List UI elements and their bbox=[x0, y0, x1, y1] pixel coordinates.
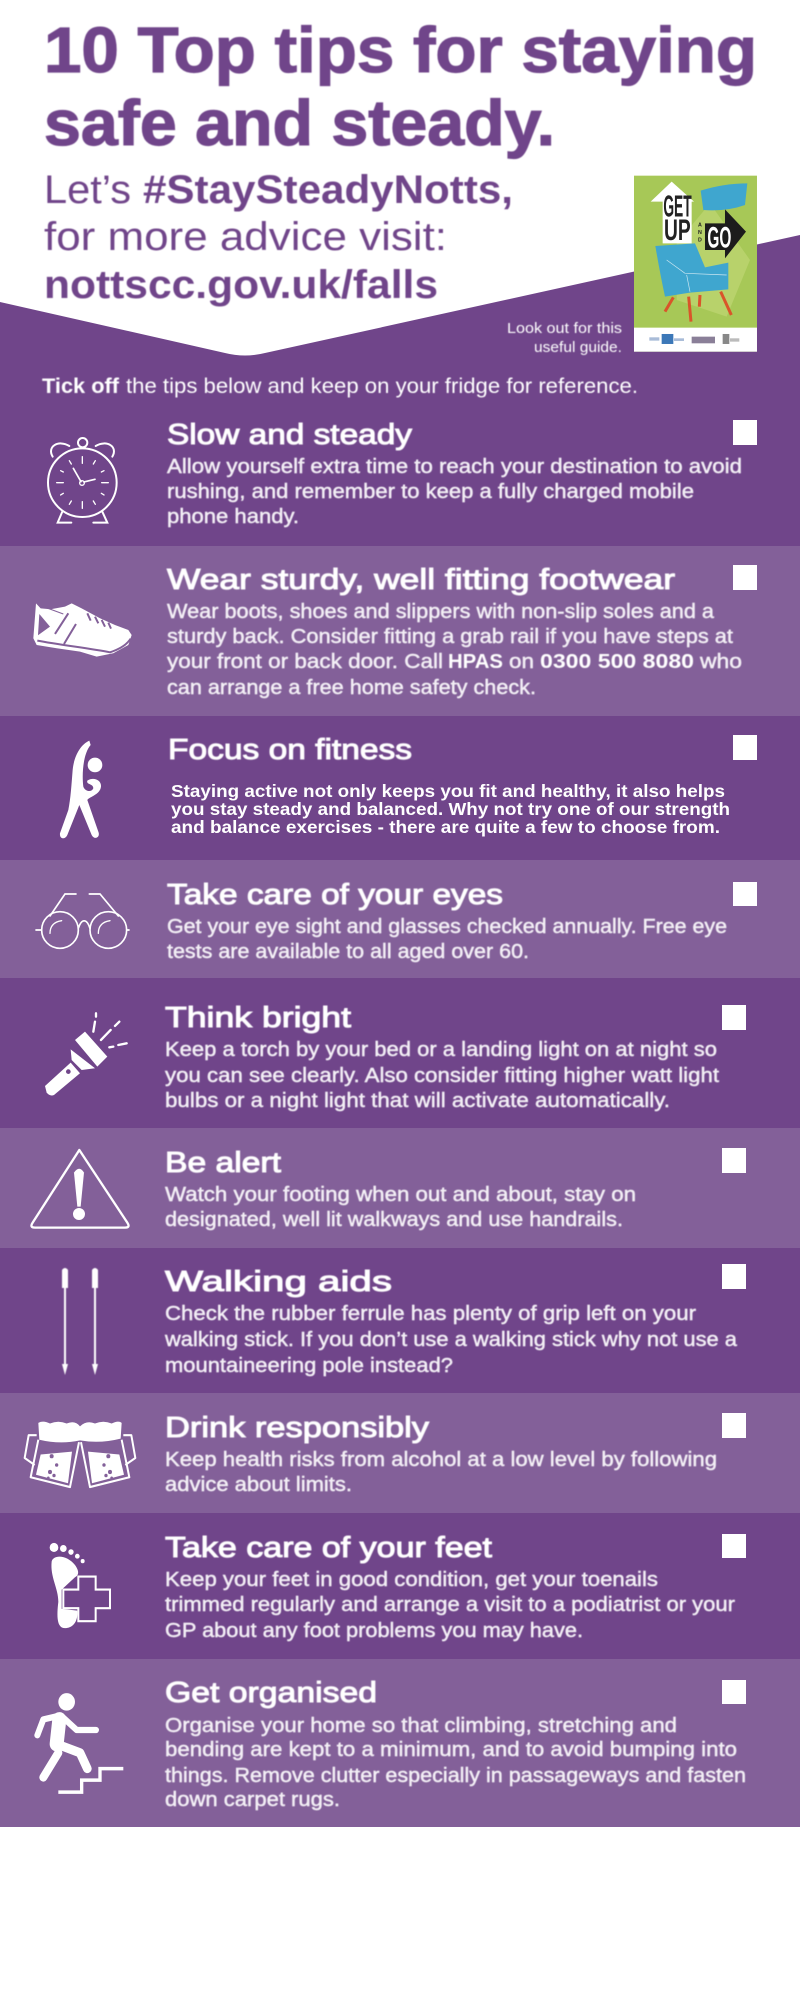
description: can arrange a free home safety check. bbox=[167, 677, 536, 699]
guide cover: Get Up and Go: GET bbox=[663, 190, 692, 224]
band bbox=[0, 1659, 800, 1827]
icon: foot with medical cross bbox=[50, 1543, 110, 1628]
band bbox=[0, 1128, 800, 1248]
main title: safe and steady. bbox=[44, 87, 555, 159]
band bbox=[0, 1248, 800, 1393]
band bbox=[0, 546, 800, 716]
icon: walking poles bbox=[62, 1268, 98, 1375]
description: Allow yourself extra time to reach your destination to avoid bbox=[167, 456, 742, 478]
heading: Be alert bbox=[165, 1147, 281, 1179]
tip 5: think bright bbox=[0, 978, 800, 1128]
description bbox=[165, 1039, 719, 1112]
tip 7: walking aids bbox=[0, 1248, 800, 1393]
guide cover: Get Up and Go: D bbox=[698, 237, 702, 243]
guide caption bbox=[507, 320, 622, 356]
description: Keep health risks from alcohol at a low level by following bbox=[165, 1449, 717, 1471]
tick box bbox=[733, 420, 757, 445]
description: Get your eye sight and glasses checked annually. Free eye bbox=[167, 916, 727, 938]
description: GP about any foot problems you may have. bbox=[165, 1620, 583, 1642]
description: Staying active not only keeps you fit and healthy, it also helps bbox=[171, 781, 725, 801]
description: things. Remove clutter especially in passageways and fasten bbox=[165, 1765, 746, 1787]
guide cover: Get Up and Go: GO bbox=[707, 221, 731, 254]
tip 6: be alert bbox=[0, 1128, 800, 1248]
description: Check the rubber ferrule has plenty of grip left on your bbox=[165, 1303, 696, 1325]
description: walking stick. If you don’t use a walking stick why not use a bbox=[164, 1329, 738, 1351]
guide cover: Get Up and Go: UP bbox=[664, 214, 691, 247]
heading: Think bright bbox=[165, 1002, 351, 1034]
description: on bbox=[509, 651, 534, 673]
description: you can see clearly. Also consider fitting higher watt light bbox=[165, 1065, 719, 1087]
guide caption: Look out for this bbox=[507, 320, 622, 337]
tip 3: fitness bbox=[0, 716, 800, 860]
heading: Take care of your eyes bbox=[167, 879, 503, 911]
main title: 10 Top tips for staying bbox=[44, 14, 757, 86]
tick box bbox=[722, 1680, 746, 1704]
description: Organise your home so that climbing, stretching and bbox=[165, 1715, 677, 1737]
heading: Slow and steady bbox=[167, 419, 413, 451]
description: advice about limits. bbox=[165, 1474, 352, 1496]
description: designated, well lit walkways and use handrails. bbox=[165, 1209, 623, 1231]
subtitle with hashtag and web address: nottscc.gov.uk/falls bbox=[44, 263, 438, 307]
tip 4: eyes bbox=[0, 860, 800, 978]
tip 9: feet bbox=[0, 1513, 800, 1659]
subtitle with hashtag and web address: #StaySteadyNotts, bbox=[143, 168, 513, 212]
description bbox=[167, 916, 727, 963]
instruction line: the tips below and keep on your fridge for reference. bbox=[126, 375, 638, 398]
band bbox=[0, 860, 800, 978]
instruction line: Tick off bbox=[42, 375, 120, 398]
description: bulbs or a night light that will activate automatically. bbox=[165, 1090, 670, 1112]
description bbox=[165, 1184, 636, 1231]
description: HPAS bbox=[448, 651, 503, 673]
description bbox=[165, 1715, 746, 1811]
guide caption: useful guide. bbox=[534, 339, 622, 356]
description bbox=[167, 456, 742, 528]
heading: Wear sturdy, well fitting footwear bbox=[167, 564, 675, 596]
guide cover: Get Up and Go: A bbox=[698, 223, 702, 229]
band bbox=[0, 1513, 800, 1659]
main title bbox=[44, 14, 757, 159]
icon: stretching figure bbox=[60, 741, 102, 838]
description: down carpet rugs. bbox=[165, 1789, 340, 1811]
description: and balance exercises - there are quite a few to choose from. bbox=[171, 817, 720, 837]
description: 0300 500 8080 bbox=[540, 651, 694, 673]
description: your front or back door. Call bbox=[167, 651, 443, 673]
icon: alarm clock bbox=[48, 438, 117, 523]
heading: Take care of your feet bbox=[165, 1532, 492, 1564]
subtitle with hashtag and web address: Let’s bbox=[44, 168, 131, 212]
heading: Walking aids bbox=[165, 1266, 392, 1298]
icon: warning triangle bbox=[31, 1150, 129, 1228]
description bbox=[165, 1449, 717, 1496]
description bbox=[164, 1303, 738, 1377]
tick box bbox=[722, 1148, 746, 1173]
subtitle with hashtag and web address: for more advice visit: bbox=[44, 215, 447, 259]
description: trimmed regularly and arrange a visit to a podiatrist or your bbox=[165, 1594, 735, 1616]
subtitle with hashtag and web address bbox=[44, 168, 513, 307]
tick box bbox=[733, 882, 757, 906]
description: phone handy. bbox=[167, 506, 299, 528]
band bbox=[0, 978, 800, 1128]
description: who bbox=[699, 651, 742, 673]
description: Wear boots, shoes and slippers with non-slip soles and a bbox=[167, 601, 715, 623]
description: bending are kept to a minimum, and to avoid bumping into bbox=[165, 1739, 737, 1761]
guide cover: Get Up and Go: N bbox=[698, 230, 702, 236]
guide cover: Get Up and Go bbox=[634, 176, 757, 352]
icon: torch bbox=[45, 1013, 127, 1095]
icon: clinking beer glasses bbox=[25, 1422, 135, 1487]
tip 10: get organised bbox=[0, 1659, 800, 1827]
header purple background shape bbox=[0, 235, 800, 546]
description bbox=[165, 1569, 735, 1642]
description bbox=[167, 601, 742, 699]
icon: person climbing stairs bbox=[37, 1693, 123, 1792]
tick box bbox=[722, 1534, 746, 1558]
description: mountaineering pole instead? bbox=[165, 1355, 453, 1377]
description: rushing, and remember to keep a fully charged mobile bbox=[167, 481, 694, 503]
band bbox=[0, 716, 800, 860]
description: you stay steady and balanced. Why not try one of our strength bbox=[171, 799, 730, 819]
tip 8: drink responsibly bbox=[0, 1393, 800, 1513]
description: sturdy back. Consider fitting a grab rail if you have steps at bbox=[167, 626, 733, 648]
tick box bbox=[733, 565, 757, 590]
tick box bbox=[722, 1005, 746, 1030]
description: Watch your footing when out and about, stay on bbox=[165, 1184, 636, 1206]
heading: Get organised bbox=[165, 1677, 377, 1709]
tick box bbox=[722, 1264, 746, 1289]
description: tests are available to all aged over 60. bbox=[167, 941, 529, 963]
description: Keep your feet in good condition, get your toenails bbox=[165, 1569, 658, 1591]
description: Keep a torch by your bed or a landing light on at night so bbox=[165, 1039, 717, 1061]
tick box bbox=[722, 1413, 746, 1438]
tick box bbox=[733, 735, 757, 760]
tip 1: slow and steady bbox=[48, 419, 757, 528]
band bbox=[0, 1393, 800, 1513]
heading: Drink responsibly bbox=[165, 1412, 430, 1444]
description bbox=[171, 781, 730, 837]
icon: trainer shoe bbox=[33, 603, 132, 657]
heading: Focus on fitness bbox=[168, 734, 412, 766]
icon: glasses bbox=[36, 894, 129, 948]
tip 2: footwear bbox=[0, 546, 800, 716]
